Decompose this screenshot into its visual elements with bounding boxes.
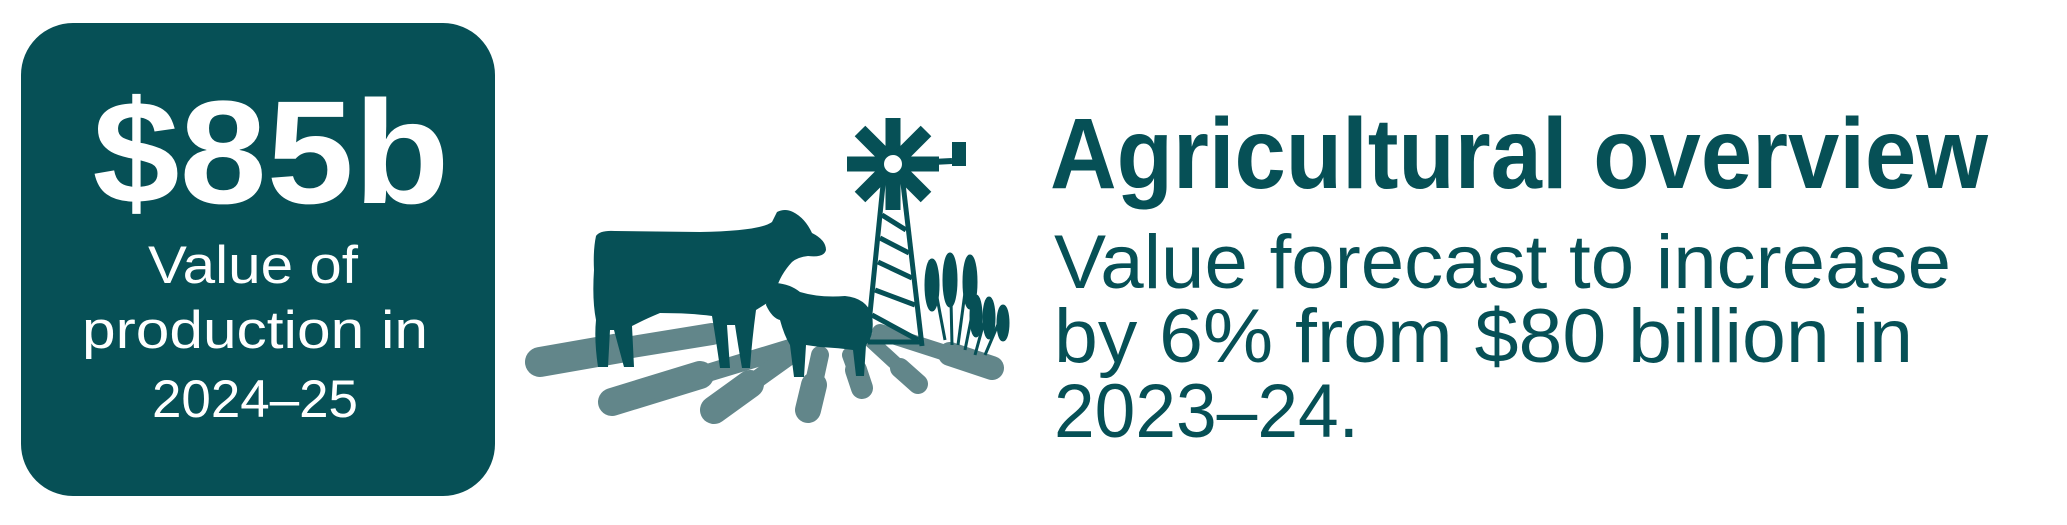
windmill — [847, 118, 966, 346]
big number: $85b — [92, 71, 450, 235]
subtitle text — [1054, 220, 1951, 454]
box caption: 2024–25 — [152, 370, 358, 429]
subtitle text: by 6% from $80 billion in — [1054, 294, 1913, 379]
box caption: Value of — [148, 236, 358, 295]
panel: value box — [21, 23, 495, 496]
subtitle text: 2023–24. — [1054, 369, 1359, 454]
icon: farm scene — [540, 118, 1008, 410]
box caption — [82, 236, 428, 429]
sheep — [766, 283, 873, 377]
cow — [593, 210, 826, 368]
subtitle text: Value forecast to increase — [1054, 220, 1951, 305]
shadow rays — [540, 332, 992, 410]
title: Agricultural overview — [1050, 98, 1988, 210]
wheat — [926, 254, 1008, 355]
box caption: production in — [82, 301, 428, 360]
